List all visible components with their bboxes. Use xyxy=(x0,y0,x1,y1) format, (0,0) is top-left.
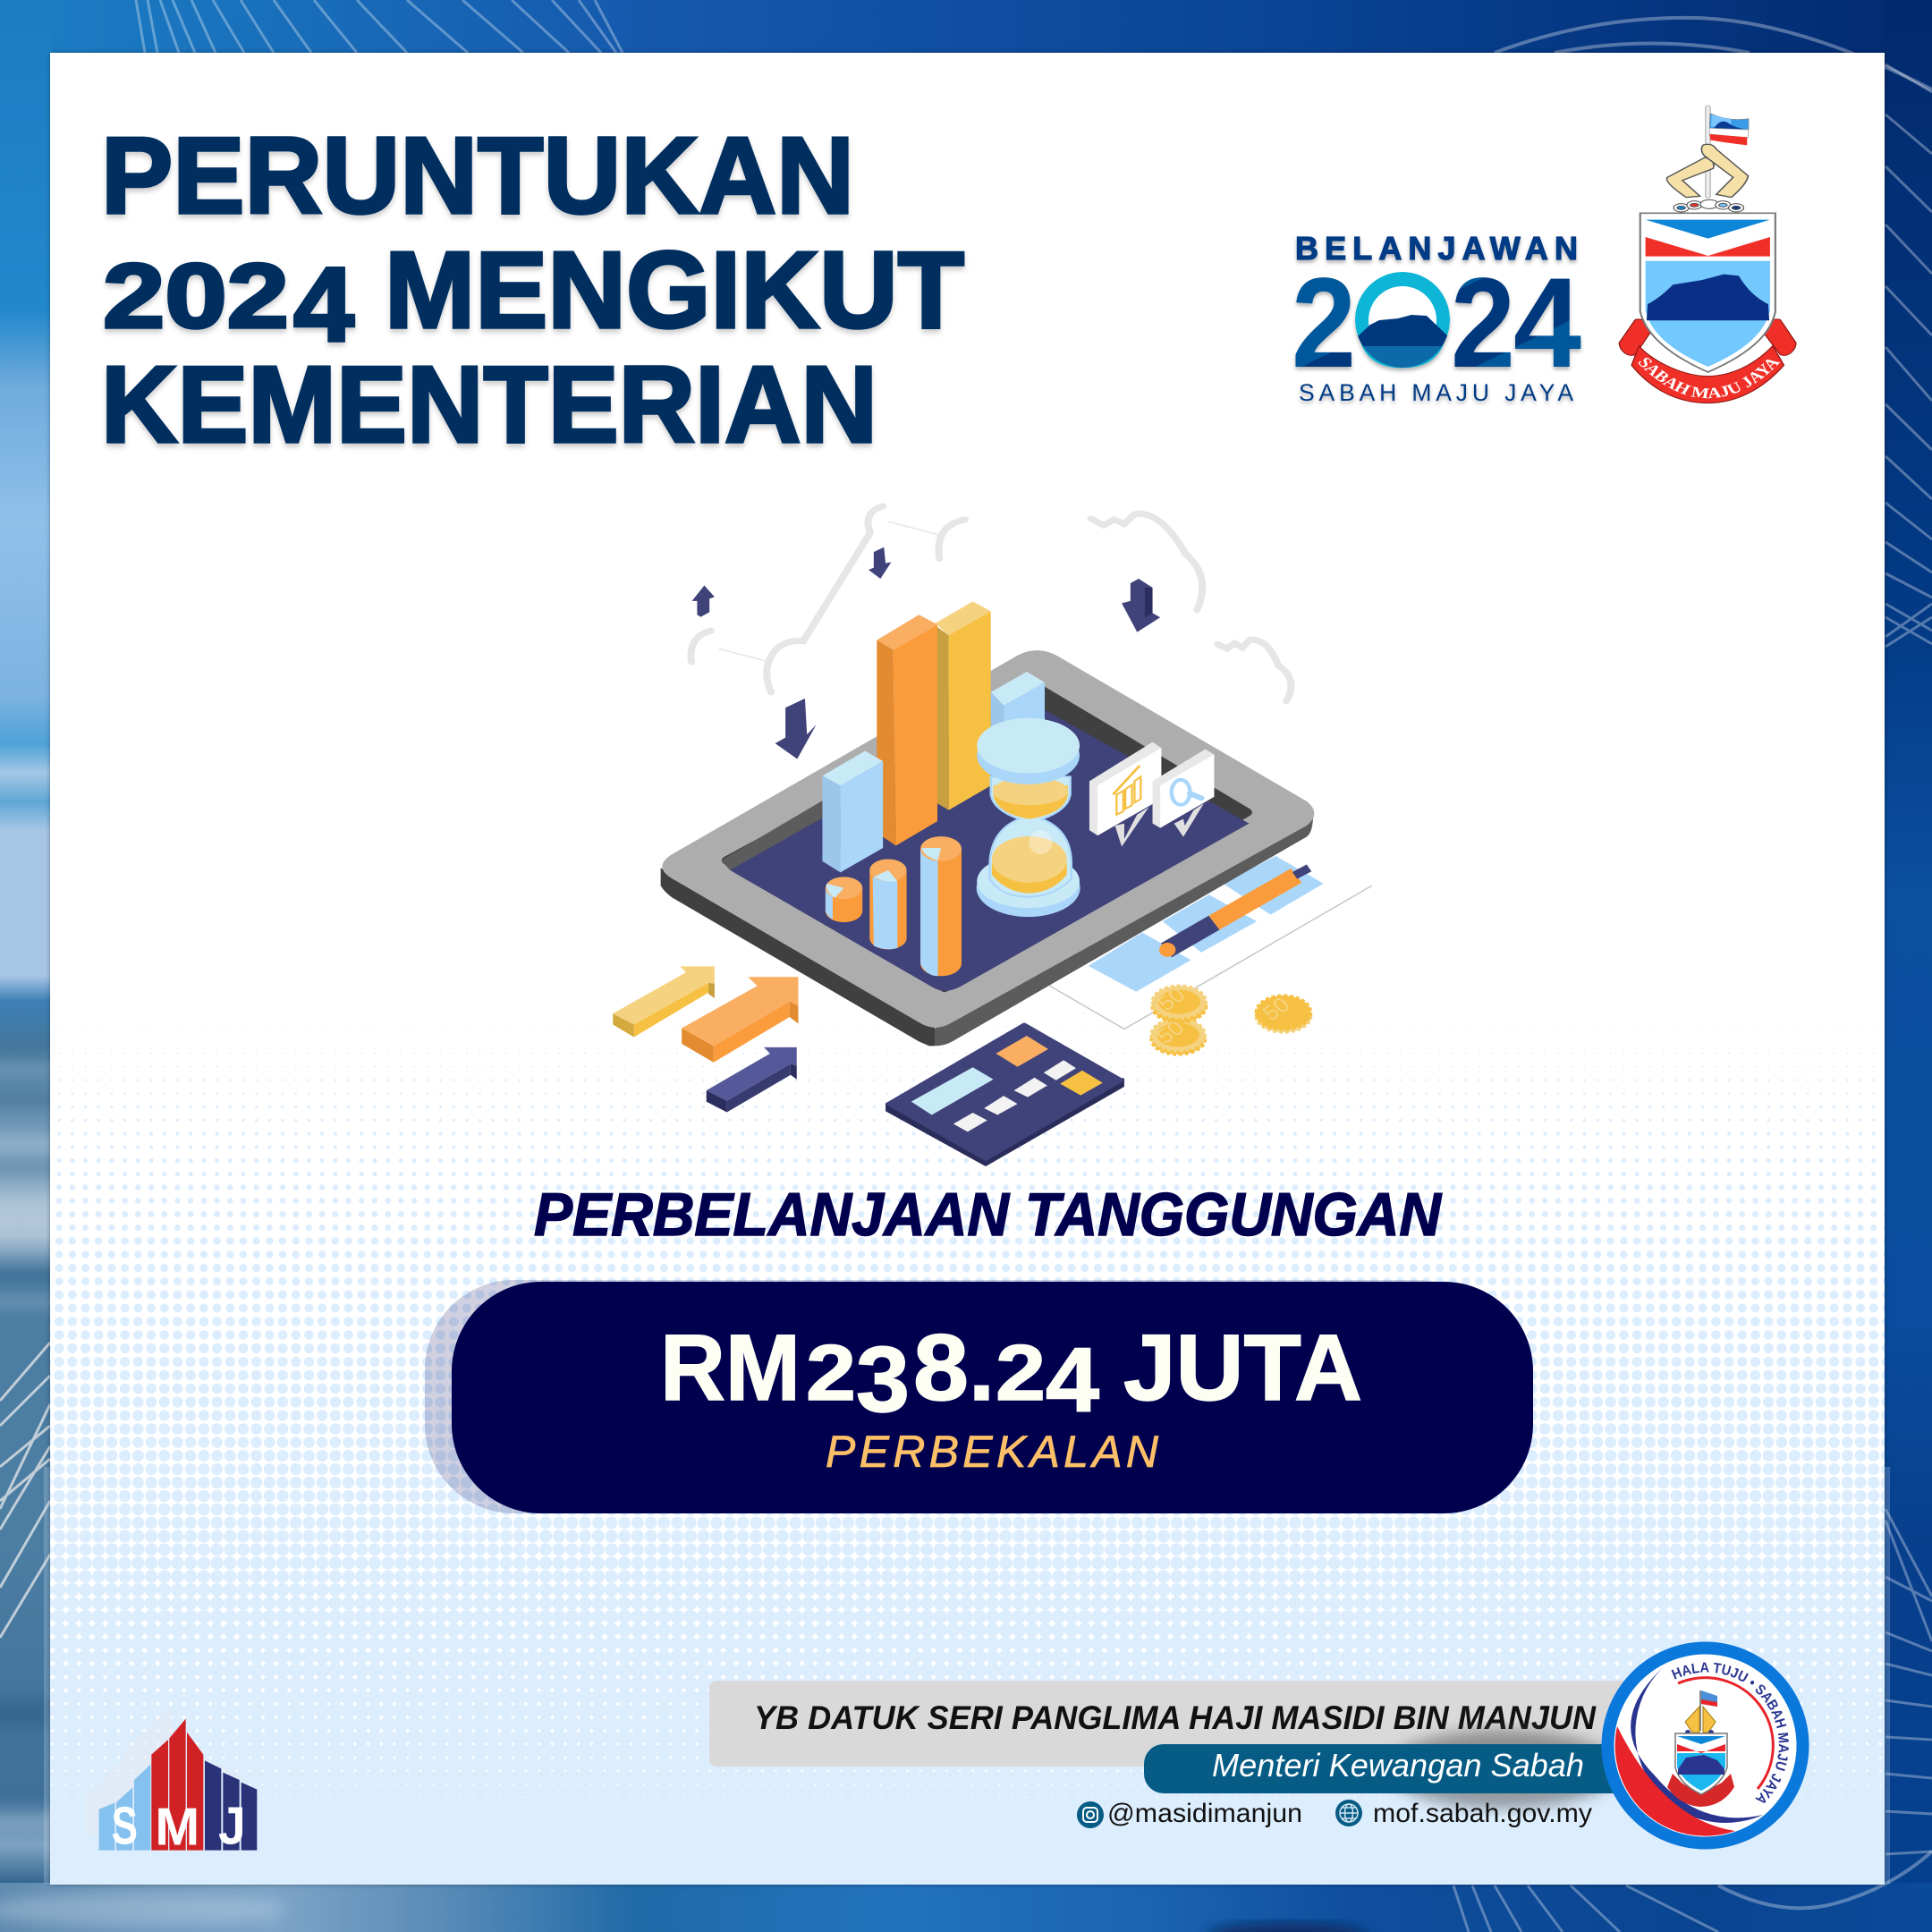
coins: 50 xyxy=(1152,1017,1189,1048)
small cylinder xyxy=(826,877,862,922)
amount: 4 xyxy=(1046,1329,1099,1431)
title: 202 xyxy=(103,245,289,347)
social: instagram: @masidimanjun xyxy=(1107,1799,1302,1828)
medium cylinder xyxy=(869,859,907,949)
navy growth arrow xyxy=(707,1047,797,1113)
logo: SMJ: M xyxy=(155,1798,199,1857)
back blue bar xyxy=(991,672,1045,741)
category label: PERBEKALAN xyxy=(826,1427,1159,1477)
chart sign xyxy=(1089,742,1161,847)
minister title pill xyxy=(1144,1730,1637,1809)
yellow growth arrow xyxy=(613,966,715,1037)
amount: 3 xyxy=(856,1328,910,1432)
amount: 2 xyxy=(996,1328,1046,1417)
logo: Sabah state crest xyxy=(1619,105,1797,404)
paper with table xyxy=(1050,856,1372,1029)
badge swooshes xyxy=(1631,1664,1763,1823)
badge: hala tuju sabah maju jaya xyxy=(1601,1642,1809,1850)
coins: 50 xyxy=(1154,984,1191,1015)
logo: Belanjawan 2024: BELANJAWAN xyxy=(1295,230,1578,267)
title: KEMENTERIAN xyxy=(101,343,877,465)
amount: RM xyxy=(660,1316,801,1420)
coins xyxy=(1151,984,1310,1055)
minister name bar xyxy=(709,1681,1640,1767)
illustration: isometric finance tablet xyxy=(613,506,1372,1165)
amount: . xyxy=(969,1316,995,1420)
pill shadow xyxy=(425,1280,1506,1513)
logo: Belanjawan 2024: 2 xyxy=(1292,252,1356,394)
logo: Belanjawan 2024: 4 xyxy=(1513,252,1581,394)
logo: SMJ xyxy=(86,1707,257,1857)
search sign xyxy=(1153,750,1214,837)
social: website: mof.sabah.gov.my xyxy=(1373,1799,1592,1828)
yellow bar xyxy=(936,601,991,810)
orange bar xyxy=(877,614,937,846)
small arrows xyxy=(692,547,1160,758)
amount pill xyxy=(425,1280,1533,1513)
logo: SMJ: S xyxy=(112,1797,138,1856)
pill body xyxy=(452,1282,1533,1513)
large cylinder xyxy=(920,836,962,976)
title: 4 xyxy=(293,246,354,364)
halftone dot background xyxy=(50,993,1885,1885)
amount: JUTA xyxy=(1123,1316,1362,1420)
credit card xyxy=(887,1025,1123,1165)
icon: instagram xyxy=(1077,1801,1104,1828)
badge mini crest xyxy=(1667,1690,1734,1807)
minister name bar: YB DATUK SERI PANGLIMA HAJI MASIDI BIN MANJUN xyxy=(754,1699,1597,1736)
heading: perbelanjaan tanggungan: PERBELANJAAN TANGGUNGAN xyxy=(534,1181,1443,1249)
amount: 8 xyxy=(913,1316,969,1420)
hourglass xyxy=(977,718,1080,917)
title xyxy=(101,114,964,465)
clouds xyxy=(691,506,1292,701)
logo: Sabah state crest: SABAH MAJU JAYA xyxy=(1639,358,1780,399)
pen xyxy=(1159,868,1309,957)
logo: Belanjawan 2024: SABAH MAJU JAYA xyxy=(1299,379,1573,406)
tablet body xyxy=(661,650,1314,1046)
badge: hala tuju sabah maju jaya: HALA TUJU • SABAH MAJU JAYA xyxy=(1671,1662,1789,1803)
title: PERUNTUKAN xyxy=(101,114,854,236)
logo: Belanjawan 2024 xyxy=(1292,230,1581,406)
title: MENGIKUT xyxy=(385,229,964,351)
logo: Belanjawan 2024: 2 xyxy=(1451,252,1515,394)
logo: SMJ: J xyxy=(218,1797,246,1856)
orange growth arrow xyxy=(682,977,798,1063)
amount: 2 xyxy=(806,1328,856,1417)
minister title pill: Menteri Kewangan Sabah xyxy=(1212,1747,1584,1784)
icon: globe xyxy=(1335,1800,1362,1826)
coins: 50 xyxy=(1258,994,1295,1025)
front blue bar xyxy=(822,751,883,872)
logo: Belanjawan 2024: 0 xyxy=(1351,252,1454,394)
